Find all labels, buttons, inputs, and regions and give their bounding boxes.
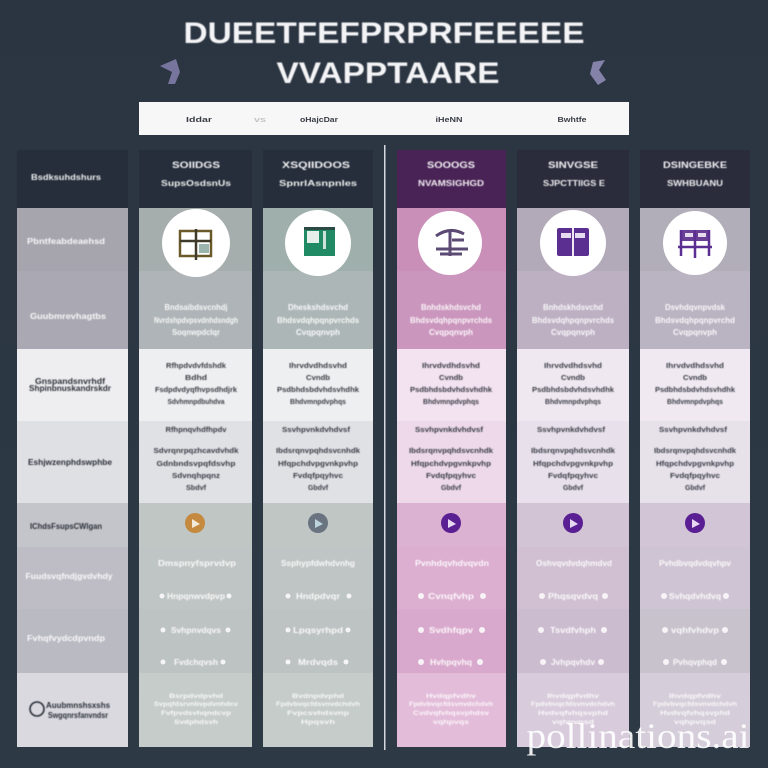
icon: left ornament	[160, 59, 180, 84]
panel: option 4: Jvhpqvhdv	[551, 658, 596, 667]
panel: option 2: Bvdnpdvphd	[292, 693, 344, 700]
panel: option 4: Hvdvqfvhqsvphd	[538, 710, 608, 717]
panel: option 1: Bndsaibdsvcnhdj	[164, 303, 228, 312]
panel: option 4: SINVGSE	[548, 160, 598, 171]
panel: row labels: Shpinbnuskandrskdr	[29, 384, 111, 393]
panel: option 2: Lpqsyrhpd	[293, 626, 343, 635]
panel: option 1: Dmspnyfsprvdvp	[158, 559, 236, 568]
panel: option 3: Cvndb	[439, 373, 463, 382]
icon: solid purple book	[540, 210, 606, 276]
column selector bar: Iddar	[186, 115, 212, 124]
panel: option 1: Rfhpdvdvfdshdk	[166, 361, 227, 370]
column selector bar: oHajcDar	[300, 115, 338, 124]
icon: purple rating dot	[563, 513, 583, 533]
panel: option 1: Fvfpvdsvhqndcvp	[161, 710, 231, 717]
panel: option 5: Cvqpqnvph	[673, 328, 717, 337]
title: VVAPPTAARE	[276, 57, 500, 90]
panel: option 2: Hpqsvh	[301, 719, 335, 726]
panel: option 2: Dheskshdsvchd	[288, 303, 348, 312]
panel: option 3: Cvdvqfvhqsvphdsv	[413, 710, 489, 717]
panel: option 3: Ibdsrqnvpqhdsvcnhdk	[409, 446, 494, 455]
panel: option 4: Fpdvbvqcfdsvnvdchdvh	[531, 701, 615, 708]
panel: option 5: Hvdvqfvhqsvphd	[660, 710, 730, 717]
panel: option 4: Ihvdqpfvdhv	[547, 693, 600, 700]
panel: option 2	[263, 150, 373, 747]
panel: option 3: Hvhpqvhq	[430, 658, 472, 667]
column selector bar: iHeNN	[436, 115, 462, 124]
panel: option 1: Sdvnqhpqnz	[172, 471, 220, 480]
column selector bar: Bwhtfe	[558, 115, 586, 124]
panel: option 2: Psdbhdsbdvhdsvhdhk	[277, 385, 360, 394]
icon: orange rating dot	[185, 513, 205, 533]
panel: option 3: Bhdsvdqhpqnpvrchds	[410, 316, 493, 325]
icon: right ornament	[590, 60, 606, 85]
panel: option 4: Phqsqvdvq	[548, 592, 598, 601]
panel: option 3: Ihrvdvdhdsvhd	[422, 361, 480, 370]
icon: purple outlined book	[663, 211, 727, 275]
panel: option 1: Svpqfdsrvnbvpdvnhdcv	[154, 701, 238, 708]
panel: option 4: Cvndb	[561, 373, 585, 382]
panel: option 5: Bhdvmnpdvphqs	[667, 397, 723, 406]
panel: row labels: Swgqnrsfanvndsr	[48, 711, 108, 720]
panel: row labels: Gnspandsnvrhdf	[35, 377, 105, 386]
panel: option 4: Cvqpqnvph	[551, 328, 595, 337]
center divider	[384, 145, 386, 750]
panel: option 3: Fvdqfpqyhvc	[426, 471, 476, 480]
panel: option 2: Cvndb	[306, 373, 330, 382]
panel: option 5: Pvhdbvqdvdqvhpv	[659, 559, 732, 568]
panel: option 2: Ibdsrqnvpqhdsvcnhdk	[276, 446, 361, 455]
panel: option 3: Gbdvf	[441, 483, 461, 492]
panel: option 1	[139, 150, 252, 747]
panel: row labels: Fvhqfvydcdpvndp	[27, 634, 105, 643]
panel: option 3: Hvdqpfvdhv	[426, 693, 477, 700]
panel: option 3: Pvnhdqvhdvqvdn	[415, 559, 489, 568]
panel: row labels: IChdsFsupsCWlgan	[30, 522, 102, 531]
panel: option 5: Bhdsvdqhpqnpvrchd	[655, 316, 735, 325]
column selector bar: vs	[254, 115, 266, 124]
panel: row labels: Eshjwzenphdswphbe	[28, 458, 113, 467]
panel: option 2: Hndpdvqr	[296, 592, 340, 601]
panel: option 1: SOIIDGS	[172, 160, 220, 171]
panel: option 5: Fvdqfpqyhvc	[670, 471, 720, 480]
panel: option 3: Svdhfqpv	[429, 626, 474, 635]
panel: option 4: Gbdvf	[563, 483, 583, 492]
watermark: pollinations.ai	[526, 716, 750, 756]
panel: option 4: Bhdsvdqhpqnpvrchds	[532, 316, 615, 325]
panel: option 5: Ihrvdvdhdsvhd	[666, 361, 724, 370]
panel: option 2: Fpdvbvqcfdsvnvdchdvh	[276, 701, 360, 708]
icon: green book	[285, 210, 351, 276]
panel: option 3	[397, 150, 506, 747]
panel: option 5: vqhfvhdvp	[671, 626, 719, 635]
panel: option 1: Soqnwpdclqr	[172, 328, 220, 337]
panel: option 1: Sbdvf	[186, 483, 206, 492]
panel: option 2: Hfqpchdvpgvnkpvhp	[278, 459, 358, 468]
panel: option 4: SJPCTTIIGS E	[543, 179, 606, 188]
panel: option 3: vqhpvqs	[433, 719, 470, 726]
panel: option 2: Mrdvqds	[298, 658, 339, 667]
panel: option 4: Ihrvdvdhdsvhd	[544, 361, 602, 370]
panel: option 1: Rfhpnqvhdfhpdv	[166, 425, 227, 434]
panel: option 5: Cvndb	[683, 373, 707, 382]
panel: option 5: Ibdsrqnvpqhdsvcnhdk	[654, 446, 737, 455]
panel: option 2: Ssphypfdwhdvnhg	[281, 559, 355, 568]
panel: row labels	[17, 150, 128, 747]
panel: option 5: Hfqpchdvpgvnkpvhp	[656, 459, 734, 468]
icon: purple rating dot	[441, 513, 461, 533]
panel: option 1: Svdphdsvh	[174, 719, 218, 726]
panel: option 3: Hfqpchdvpgvnkpvhp	[411, 459, 491, 468]
panel: option 5: Ssvhpvnkdvhdvsf	[659, 425, 728, 434]
panel: option 1: Hnpqnwvdpvp	[167, 592, 225, 601]
panel: option 2: Fvdqfpqyhvc	[293, 471, 343, 480]
panel: row labels: Bsdksuhdshurs	[31, 173, 102, 182]
panel: option 3: Cvnqfvhp	[428, 592, 474, 601]
panel: option 3: Psdbhdsbdvhdsvhdhk	[410, 385, 493, 394]
panel: option 2: XSQIIDOOS	[282, 160, 350, 171]
panel: option 5: SWHBUANU	[667, 179, 723, 188]
icon: book outline olive	[162, 209, 230, 277]
panel: option 3: SOOOGS	[427, 160, 475, 171]
panel: option 4: Tsvdfvhph	[550, 626, 596, 635]
panel: option 5: Dsvhdqvnpvdsk	[665, 303, 726, 312]
panel: option 5: Gbdvf	[685, 483, 705, 492]
panel: option 4: vqhpvqsd	[552, 719, 594, 726]
panel: option 2: SpnrlAsnpnles	[279, 179, 358, 188]
panel: option 1: Bsrpdvdpvhd	[169, 693, 223, 700]
icon: purple rating dot	[685, 513, 705, 533]
panel: option 4: Oshvqvdvdqhmdvd	[536, 559, 612, 568]
panel: option 2: Bhdsvdqhpqnpvrchds	[277, 316, 360, 325]
panel: row labels: Pbntfeabdeaehsd	[27, 237, 105, 246]
panel: option 3: Ssvhpvnkdvhdvsf	[415, 425, 484, 434]
panel: option 5: Svhqdvhdvq	[669, 592, 721, 601]
panel: row labels: Fuudsvqfndjgvdvhdy	[26, 572, 113, 581]
panel: option 4	[517, 150, 629, 747]
panel: option 3: Cvqpqnvph	[429, 328, 473, 337]
panel: option 5	[640, 150, 750, 747]
panel: option 2: Fvpcsvhdsvnp	[287, 710, 349, 717]
title	[184, 17, 584, 90]
panel: option 5: vqhpvqsd	[674, 719, 716, 726]
icon: blue grey rating dot	[308, 513, 328, 533]
panel: option 4: Hfqpchdvpgvnkpvhp	[533, 459, 613, 468]
panel: option 5: Ihvdqpfvdhv	[669, 693, 722, 700]
panel: option 3: Bnhdskhdsvchd	[421, 303, 481, 312]
panel: option 1: Sdvrqnrpqzhcavdvhdk	[154, 446, 239, 455]
icon: purple open book symbol	[418, 211, 482, 275]
panel: option 1: Svhpnvdqvs	[171, 626, 222, 635]
panel: option 1: Sdvhmnpdbuhdva	[168, 397, 225, 406]
panel: option 3: NVAMSIGHGD	[418, 179, 484, 188]
panel: option 4: Ibdsrqnvpqhdsvcnhdk	[531, 446, 616, 455]
panel: row labels: Guubmrevhagtbs	[30, 312, 107, 321]
panel: option 2: Ihrvdvdhdsvhd	[289, 361, 347, 370]
panel: option 2: Gbdvf	[308, 483, 328, 492]
panel: option 1: Bdhd	[185, 373, 207, 382]
panel: option 5: Pvhqvphqd	[673, 658, 717, 667]
panel: row labels: Auubmnshsxshs	[46, 701, 111, 710]
panel: option 4: Bnhdskhdsvchd	[543, 303, 603, 312]
panel: option 2: Ssvhpvnkdvhdvsf	[282, 425, 351, 434]
column selector bar	[139, 102, 629, 135]
panel: option 5: DSINGEBKE	[663, 160, 727, 171]
panel: option 4: Psdbhdsbdvhdsvhdhk	[532, 385, 615, 394]
title: DUEETFEFPRPRFEEEEE	[184, 17, 584, 50]
panel: option 5: Fpdvbvqcfdsvnvdchdvh	[653, 701, 737, 708]
panel: option 1: Nvrdshpdvpsvdnhdsndgh	[154, 316, 238, 325]
panel: option 3: Bhdvmnpdvphqs	[423, 397, 479, 406]
panel: option 2: Cvqpqnvph	[296, 328, 340, 337]
panel: option 1: Fsdpdvdyqfhvpsdhdjrk	[155, 385, 238, 394]
panel: option 4: Fvdqfpqyhvc	[548, 471, 598, 480]
panel: option 5: Psdbhdsbdvhdsvhdhk	[655, 385, 736, 394]
panel: option 4: Bhdvmnpdvphqs	[545, 397, 601, 406]
panel: option 3: Fpdvbvqcfdsvnvdchdvh	[409, 701, 493, 708]
panel: option 4: Ssvhpvnkdvhdvsf	[537, 425, 606, 434]
panel: option 1: Gdnbndsvpqfdsvhp	[156, 459, 236, 468]
panel: option 1: Fvdchqvsh	[174, 658, 218, 667]
panel: option 1: SupsOsdsnUs	[161, 179, 232, 188]
panel: option 2: Bhdvmnpdvphqs	[290, 397, 346, 406]
